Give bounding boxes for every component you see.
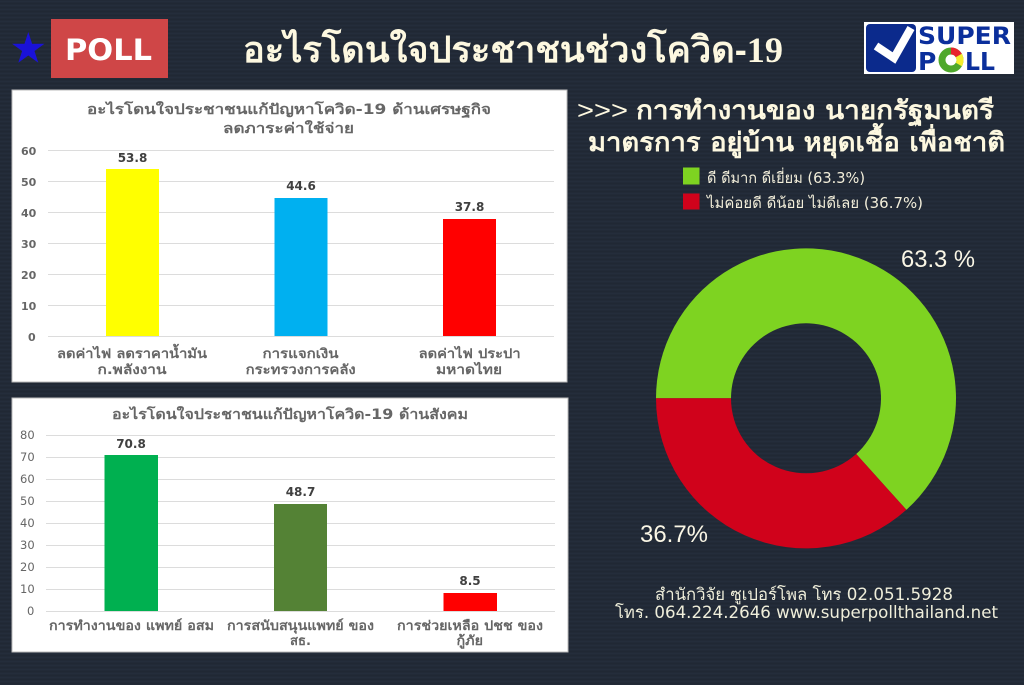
y axis: economic: 10 (21, 300, 37, 313)
bar: 37.8 (419, 200, 521, 378)
logo: super poll: LL (965, 47, 995, 76)
y axis: economic (21, 145, 37, 344)
y axis: social: 60 (20, 472, 35, 486)
y axis: economic: 0 (28, 331, 36, 344)
y axis: economic: 60 (21, 145, 37, 158)
y axis: social: 10 (20, 582, 35, 596)
bar: 53.8: ก.พลังงาน (98, 363, 167, 378)
bar: 70.8: การทำงานของ แพทย์ อสม (49, 618, 214, 634)
bar: 48.7 (227, 485, 374, 649)
icon: blue star (12, 32, 45, 63)
bar: 44.6: 44.6 (286, 179, 316, 193)
y axis: social: 70 (20, 450, 35, 464)
logo: super poll (864, 22, 1014, 76)
y axis: social: 80 (20, 428, 35, 442)
y axis: social: 30 (20, 538, 35, 552)
logo: super poll: P (918, 47, 936, 76)
bar: 53.8 (57, 151, 207, 378)
heading: prime minister: การทำงานของ นายกรัฐมนตรี (636, 96, 994, 128)
bar: 53.8: ลดค่าไฟ ลดราคาน้ำมัน (57, 343, 207, 362)
logo: super poll: SUPER (918, 22, 1011, 50)
legend (683, 167, 923, 212)
bar: 8.5: กู้ภัย (456, 633, 483, 649)
bar: 8.5 (397, 574, 543, 649)
chart title: economic (87, 100, 491, 137)
y axis: economic: 30 (21, 238, 37, 251)
y axis: social: 40 (20, 516, 35, 530)
y axis: economic: 40 (21, 207, 37, 220)
chart title: social: อะไรโดนใจประชาชนแก้ปัญหาโควิด-19 ด้านสังคม (112, 405, 468, 423)
legend: ไม่ค่อยดี ดีน้อย ไม่ดีเลย (36.7%) (706, 194, 923, 212)
donut chart (656, 248, 956, 548)
bar: 44.6: กระทรวงการคลัง (246, 363, 356, 378)
bar: 48.7: การสนับสนุนแพทย์ ของ (227, 618, 374, 634)
heading: prime minister: >>> (577, 95, 628, 125)
label: 63.3 percent: 63.3 % (901, 246, 975, 273)
bar: 53.8: 53.8 (118, 151, 147, 165)
y axis: social: 20 (20, 560, 35, 574)
bar: 48.7: สธ. (290, 634, 311, 649)
bar: 44.6 (246, 179, 356, 378)
bar: 44.6: การแจกเงิน (262, 347, 339, 362)
footer contact: สำนักวิจัย ซูเปอร์โพล โทร 02.051.5928 (655, 585, 953, 605)
title: อะไรโดนใจประชาชนช่วงโควิด-19 (243, 28, 783, 70)
y axis: social (20, 428, 35, 618)
bar: 8.5: 8.5 (459, 574, 481, 588)
heading: prime minister (577, 95, 1005, 159)
bar: 8.5: การช่วยเหลือ ปชช ของ (397, 618, 543, 634)
legend: ดี ดีมาก ดีเยี่ยม (63.3%) (707, 167, 865, 187)
panel: social chart (12, 398, 568, 652)
bar: 37.8: ลดค่าไฟ ประปา (419, 345, 521, 362)
poll badge: POLL (65, 33, 152, 67)
bar: 70.8: 70.8 (116, 437, 146, 451)
y axis: economic: 20 (21, 269, 37, 282)
bar: 37.8: มหาดไทย (436, 361, 502, 378)
chart title: economic: อะไรโดนใจประชาชนแก้ปัญหาโควิด-19 ด้านเศรษฐกิจ (87, 100, 491, 119)
bar: 70.8 (49, 437, 214, 634)
bar: 37.8: 37.8 (455, 200, 484, 214)
heading: prime minister: มาตรการ อยู่บ้าน หยุดเชื้อ เพื่อชาติ (588, 122, 1005, 159)
panel: economic chart (12, 90, 567, 382)
bar: 48.7: 48.7 (286, 485, 315, 499)
chart title: economic: ลดภาระค่าใช้จ่าย (223, 119, 354, 137)
y axis: economic: 50 (21, 176, 37, 189)
poll badge (51, 19, 168, 78)
footer contact: โทร. 064.224.2646 www.superpollthailand.net (615, 603, 999, 622)
footer contact (615, 585, 999, 622)
y axis: social: 50 (20, 494, 35, 508)
y axis: social: 0 (27, 604, 34, 618)
label: 36.7 percent: 36.7% (640, 521, 708, 548)
